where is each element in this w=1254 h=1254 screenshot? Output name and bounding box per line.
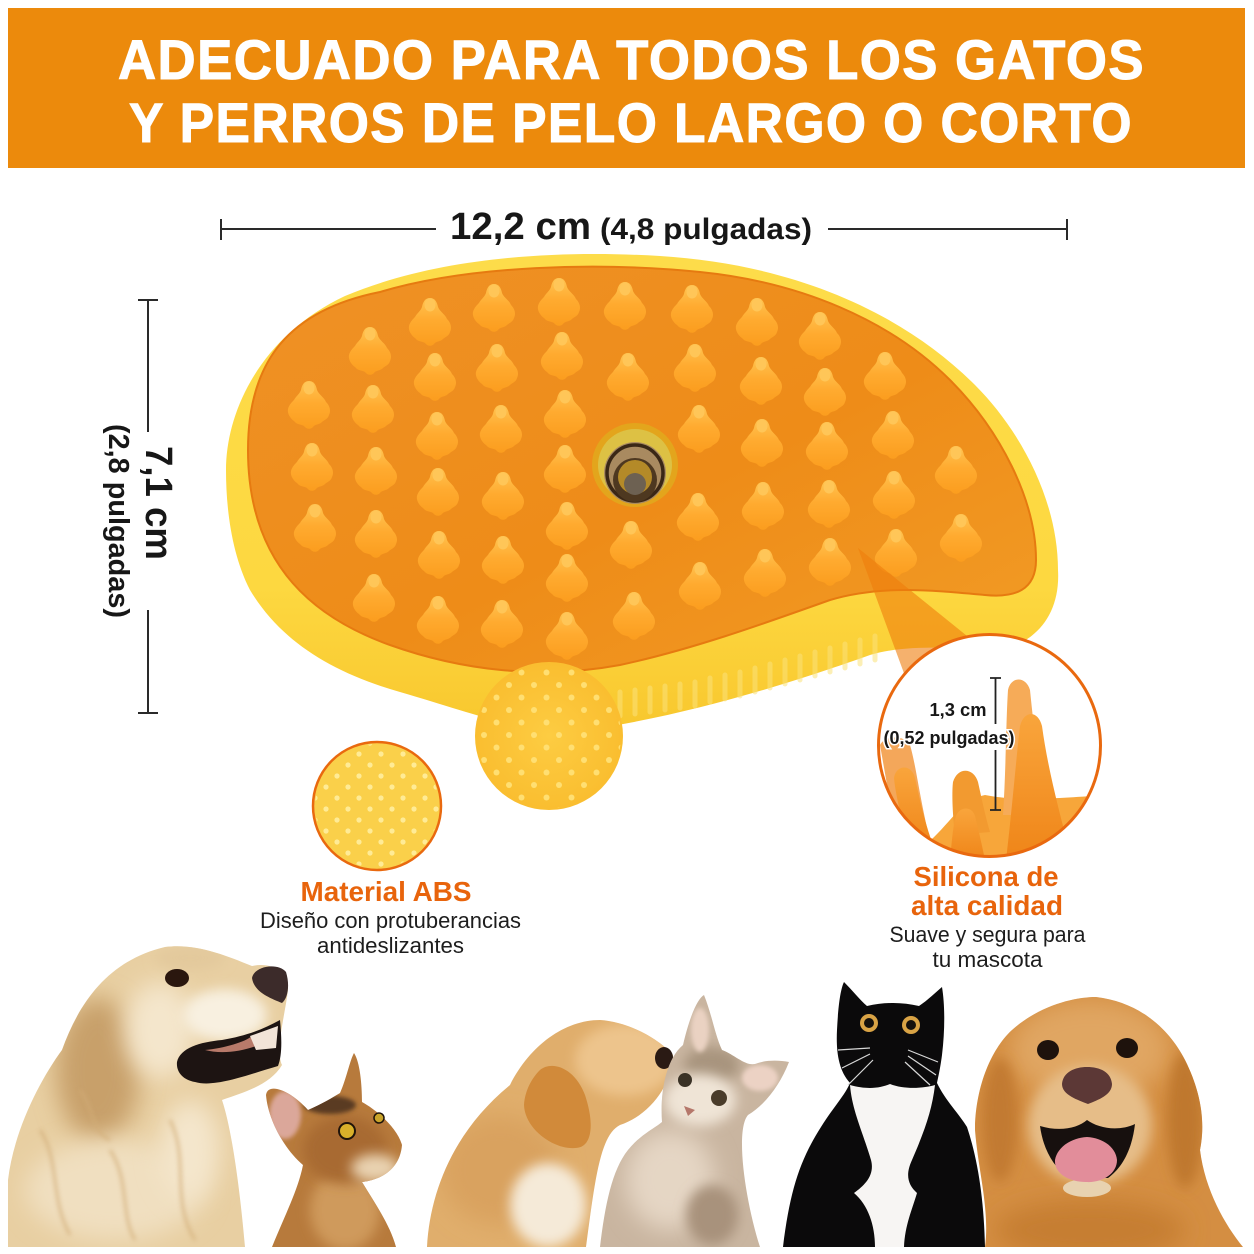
golden retriever xyxy=(970,995,1250,1254)
silicone heading xyxy=(911,861,1063,921)
ABS description: Diseño con protuberancias xyxy=(260,908,521,933)
ABS detail callout xyxy=(260,742,521,958)
silicone heading: alta calidad xyxy=(911,890,1063,921)
dog eye xyxy=(165,969,189,987)
height dimension xyxy=(102,300,179,713)
silicone magnified circle xyxy=(878,634,1105,860)
ABS magnified circle xyxy=(313,742,441,870)
steam nozzle xyxy=(592,423,678,507)
width label: 12,2 cm xyxy=(450,206,591,248)
brush ridges xyxy=(620,636,875,716)
spike height measure xyxy=(990,678,1001,810)
brush xyxy=(226,254,1058,810)
cat eyes xyxy=(339,1123,355,1139)
title: Y PERROS DE PELO LARGO O CORTO xyxy=(129,91,1133,154)
dog nose xyxy=(252,966,288,1003)
brush silicone bed xyxy=(248,267,1036,672)
width dimension xyxy=(221,206,1067,248)
silicone description xyxy=(890,922,1086,972)
cream golden retriever xyxy=(0,940,300,1250)
spike height label: 1,3 cm xyxy=(930,700,986,720)
puppy ear xyxy=(524,1066,591,1148)
tuxedo chest xyxy=(850,1084,935,1247)
header banner xyxy=(8,8,1245,168)
silicone spikes xyxy=(288,278,982,660)
puppy nose xyxy=(655,1047,673,1069)
width label inches: (4,8 pulgadas) xyxy=(600,213,812,246)
orange magnifier beam xyxy=(858,548,972,676)
spike height label: (0,52 pulgadas) xyxy=(884,728,1014,748)
golden mouth xyxy=(1040,1120,1135,1178)
pets photo row xyxy=(0,940,1250,1254)
silicone description: tu mascota xyxy=(932,947,1043,972)
silicone detail callout xyxy=(878,634,1105,972)
tuxedo whiskers xyxy=(838,1048,938,1085)
ABS description xyxy=(260,908,521,958)
title: ADECUADO PARA TODOS LOS GATOS xyxy=(118,28,1145,91)
tuxedo cat xyxy=(783,982,985,1247)
golden eyes xyxy=(1037,1040,1059,1060)
height label: 7,1 cm xyxy=(137,446,179,560)
spike height label xyxy=(884,700,1014,748)
cocker puppy xyxy=(420,1015,680,1250)
golden chin xyxy=(1063,1179,1111,1197)
tabby kitten xyxy=(596,990,796,1250)
ABS heading: Material ABS xyxy=(300,876,472,907)
dog mouth xyxy=(177,1020,281,1083)
title xyxy=(118,28,1145,154)
golden nose xyxy=(1062,1067,1112,1104)
silicone description: Suave y segura para xyxy=(890,922,1086,947)
ABS description: antideslizantes xyxy=(317,933,464,958)
height label inches: (2,8 pulgadas) xyxy=(102,424,134,618)
golden tongue xyxy=(1055,1137,1117,1182)
ABS back pad xyxy=(475,662,623,810)
abyssinian cat xyxy=(266,1053,402,1247)
kitten eyes xyxy=(678,1073,692,1087)
brush outer rim xyxy=(226,254,1058,729)
kitten nose xyxy=(684,1106,695,1116)
silicone heading: Silicona de xyxy=(914,861,1058,892)
tuxedo eyes xyxy=(860,1014,878,1032)
